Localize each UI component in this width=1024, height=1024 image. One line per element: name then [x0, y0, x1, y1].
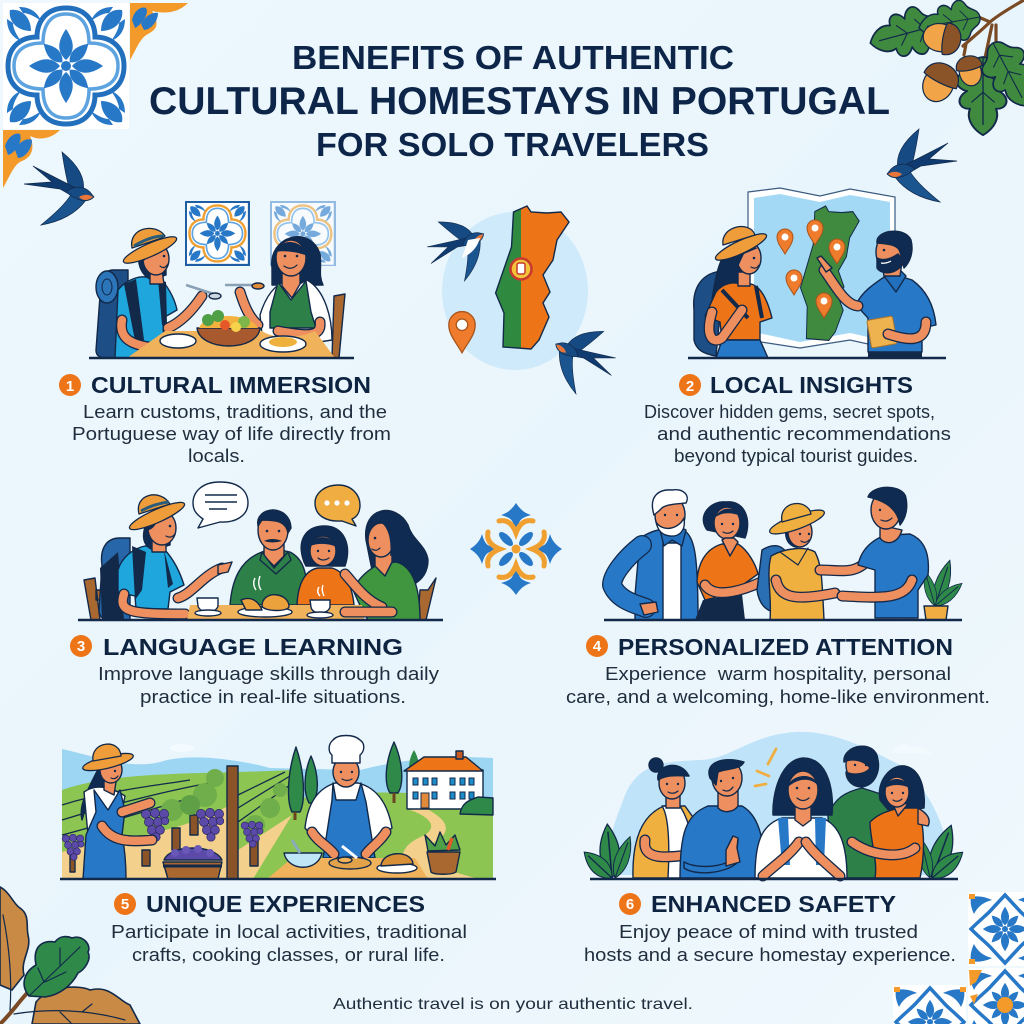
farmhouse — [404, 751, 493, 815]
landscape backdrop — [62, 744, 493, 879]
title — [149, 40, 890, 163]
figure: host eating — [225, 237, 345, 358]
figure: woman in orange — [852, 766, 929, 878]
heading: 6 enhanced safety: ENHANCED SAFETY — [651, 891, 896, 917]
figure: older man — [612, 490, 698, 620]
figure: father — [230, 510, 308, 605]
text: unique experiences description — [111, 921, 467, 965]
text: language learning description — [98, 663, 440, 707]
rays — [755, 749, 776, 786]
cypress trees — [289, 742, 419, 820]
text: language learning description: Improve language skills through daily — [98, 663, 440, 684]
figure: traveler eating — [96, 228, 221, 358]
figure: child — [297, 526, 354, 605]
title: FOR SOLO TRAVELERS — [316, 126, 709, 163]
text: enhanced safety description: Enjoy peace of mind with trusted — [619, 921, 918, 942]
scene: language learning — [78, 482, 443, 620]
figure: traveler with hat — [757, 504, 835, 620]
heading: 3 language learning: 3 — [77, 638, 85, 655]
text: cultural immersion description — [72, 401, 391, 466]
heading: 5 unique experiences: UNIQUE EXPERIENCES — [146, 891, 425, 917]
grape basket — [163, 845, 222, 879]
icon: swallow upper — [414, 204, 499, 290]
scene: enhanced safety — [579, 732, 968, 884]
icon: swallow top right — [887, 129, 957, 202]
heading: 5 unique experiences: 5 — [121, 896, 129, 913]
cloud — [892, 744, 932, 754]
text: personalized attention description — [566, 663, 990, 707]
table with food — [89, 310, 354, 358]
heading: 1 cultural immersion: CULTURAL IMMERSION — [91, 372, 371, 398]
icon: potted plant — [920, 558, 966, 620]
icon: oak leaves bottom left — [0, 887, 140, 1024]
heading: 2 local insights: 2 — [686, 378, 694, 395]
icon: swallow lower — [539, 313, 630, 404]
heading: 3 language learning: LANGUAGE LEARNING — [103, 634, 403, 660]
heading: 2 local insights: LOCAL INSIGHTS — [710, 372, 913, 398]
heading: 6 enhanced safety: 6 — [626, 896, 634, 913]
text: local insights description: beyond typical tourist guides. — [674, 445, 918, 466]
text: personalized attention description: Experience warm hospitality, personal — [605, 663, 951, 684]
figure: woman picking grapes — [81, 744, 152, 879]
icon: central tile flourish — [470, 503, 562, 595]
icon: wall tile faded — [270, 201, 336, 266]
heading: 1 cultural immersion: 1 — [66, 378, 74, 395]
icon: oak branch with acorns top right — [864, 0, 1024, 135]
figure: woman traveler — [694, 227, 772, 358]
wooden post — [227, 766, 238, 879]
footer text: Authentic travel is on your authentic travel. — [333, 996, 693, 1013]
figure: man in green with beard — [828, 746, 890, 878]
table with food — [267, 832, 460, 879]
text: cultural immersion description: Learn customs, traditions, and the — [83, 401, 387, 422]
chairs — [84, 578, 436, 620]
figure: central woman — [755, 758, 847, 878]
figure: host shaking hands — [820, 487, 928, 618]
text: local insights description — [644, 401, 951, 466]
folded map — [748, 188, 895, 350]
icon: swallow top left — [24, 152, 94, 225]
table with cups and pastries — [187, 576, 392, 620]
icon: wall tile orange — [185, 201, 250, 266]
sky blob — [607, 732, 950, 875]
vines — [62, 769, 287, 872]
figure: woman in yellow — [633, 758, 695, 878]
panel: Portugal map centre — [427, 205, 616, 395]
icon: map pin — [449, 312, 475, 353]
text: cultural immersion description: Portuguese way of life directly from — [72, 423, 391, 444]
map of Portugal flag colours — [494, 205, 570, 350]
text: unique experiences description: crafts, cooking classes, or rural life. — [132, 944, 445, 965]
icon: azulejo tiles bottom right — [893, 892, 1024, 1024]
scene: personalized attention — [604, 487, 966, 620]
text: enhanced safety description: hosts and a secure homestay experience. — [584, 944, 956, 965]
heading: 4 personalized attention: 4 — [593, 638, 602, 655]
text: cultural immersion description: locals. — [188, 445, 245, 466]
light blue circle — [442, 212, 588, 370]
text: enhanced safety description — [584, 921, 956, 965]
speech bubble orange — [315, 485, 360, 526]
figure: older woman — [695, 502, 765, 620]
figure: local man pointing — [817, 231, 936, 358]
figure: mother — [345, 511, 428, 620]
figure: chef — [305, 736, 392, 858]
figure: traveler talking — [99, 495, 232, 620]
title: BENEFITS OF AUTHENTIC — [292, 40, 734, 77]
plants — [579, 822, 968, 884]
title: CULTURAL HOMESTAYS IN PORTUGAL — [149, 80, 890, 123]
text: local insights description: Discover hidden gems, secret spots, — [644, 401, 935, 422]
scene: local insights — [688, 188, 946, 358]
scene: cultural immersion — [89, 201, 354, 358]
figure: man in blue thumbs up — [680, 760, 766, 878]
text: personalized attention description: care, and a welcoming, home-like environment. — [566, 686, 990, 707]
text: unique experiences description: Participate in local activities, traditional — [111, 921, 467, 942]
speech bubble white — [193, 482, 248, 528]
scene: unique experiences — [60, 736, 496, 879]
text: local insights description: and authentic recommendations — [657, 423, 951, 444]
icon: azulejo corner tile top left — [3, 3, 188, 188]
heading: 4 personalized attention: PERSONALIZED ATTENTION — [618, 634, 953, 660]
text: language learning description: practice in real-life situations. — [140, 686, 406, 707]
